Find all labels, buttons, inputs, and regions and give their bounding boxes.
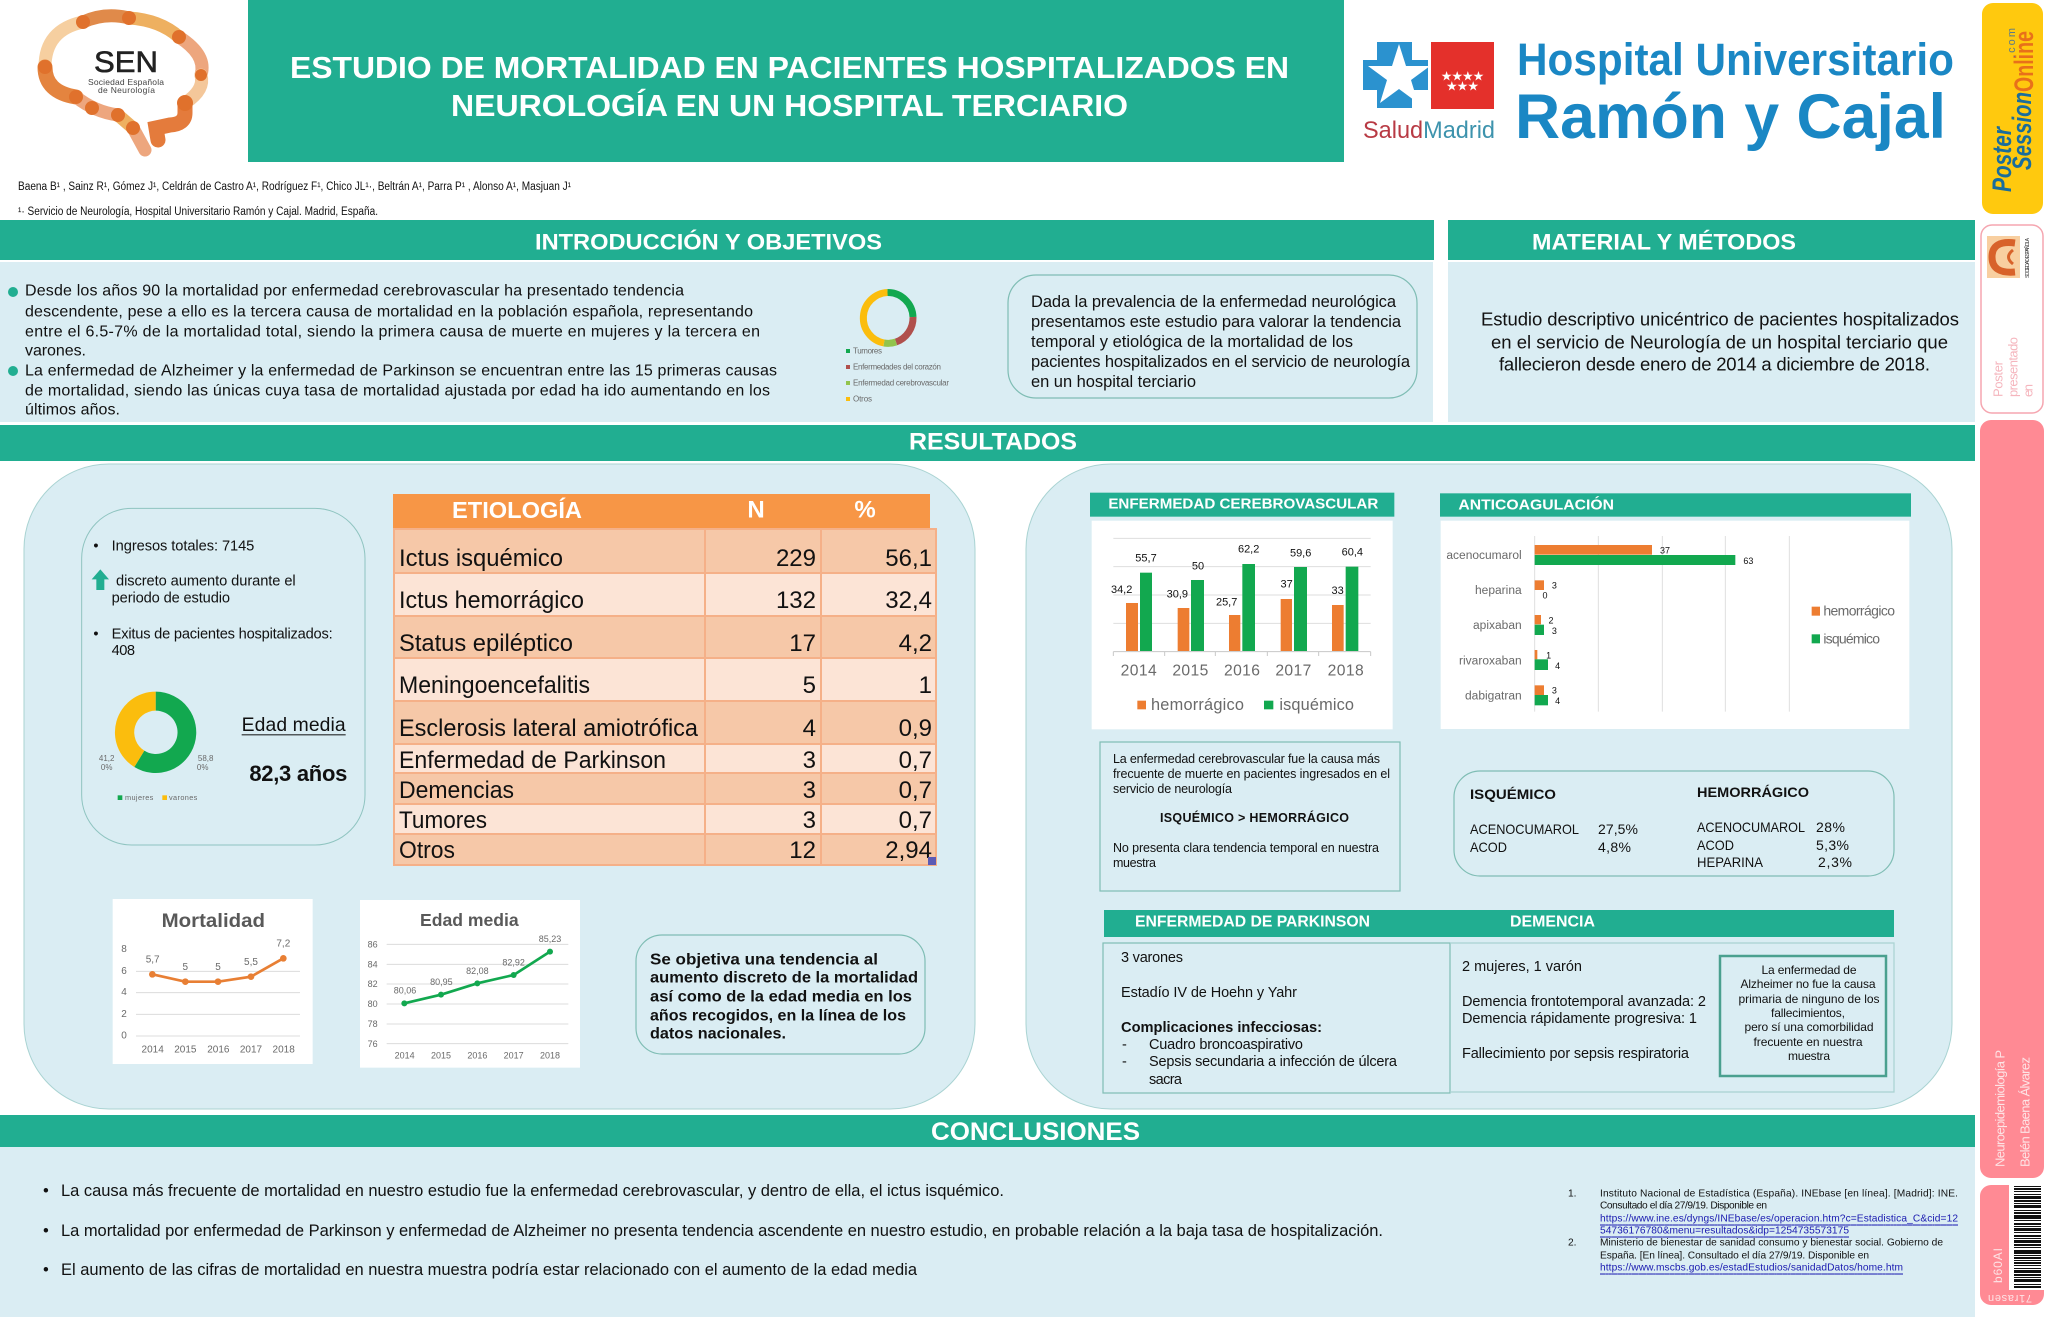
text: admissions: Exitus de pacientes hospitalizados: — [112, 626, 333, 642]
chart: enfermedad cerebrovascular: hemorrágico — [1151, 696, 1244, 714]
text box: parkinson: Sepsis secundaria a infección de úlcera — [1149, 1054, 1398, 1070]
table: etiología: Demencias — [399, 777, 514, 804]
panel: material y métodos — [1448, 220, 1975, 422]
sidebar: poster session online badge: Session — [2007, 92, 2037, 170]
chart: edad media line: 2017 — [504, 1051, 524, 1061]
text: admissions: discreto aumento durante el — [116, 574, 296, 590]
text box: cerebrovascular summary: frecuente de muerte en pacientes ingresados en el — [1113, 767, 1390, 781]
heading: introducción: INTRODUCCIÓN Y OBJETIVOS — [535, 230, 882, 254]
table: etiología: 5 — [803, 672, 816, 699]
text box: cerebrovascular summary: ISQUÉMICO > HEMORRÁGICO — [1160, 810, 1349, 825]
chart: edad media line: 80 — [368, 999, 378, 1009]
panel: results left — [24, 464, 975, 1109]
chart: anticoagulación: 37 — [1660, 546, 1670, 556]
sidebar: barcode: 71rasen — [1988, 1292, 2032, 1304]
text block: conclusions: La mortalidad por enfermedad de Parkinson y enfermedad de Alzheimer no presenta tendencia ascendente en nuestro estudio, en probable relación a la baja tasa de hospitalización. — [61, 1222, 1383, 1240]
chart: mortalidad line: 2 — [121, 1009, 127, 1020]
chart: enfermedad cerebrovascular: 34,2 — [1111, 584, 1132, 596]
chart: edad media line: 84 — [368, 959, 378, 969]
heading: parkinson and demencia: DEMENCIA — [1510, 914, 1595, 930]
chart: enfermedad cerebrovascular: 55,7 — [1135, 552, 1157, 564]
callout: alzheimer: La enfermedad de — [1762, 963, 1857, 977]
table: etiología: 32,4 — [885, 587, 932, 614]
chart: anticoagulación — [1440, 493, 1911, 729]
chart: mortalidad line: 5 — [215, 962, 221, 973]
table: etiología: % — [854, 496, 876, 524]
sidebar: poster session online badge: Online — [2009, 31, 2039, 92]
chart: mortalidad line: 5,5 — [244, 957, 258, 968]
chart: edad media line: 85,23 — [539, 934, 561, 944]
chart: mortalidad line — [113, 899, 313, 1064]
table: etiología: Status epiléptico — [399, 630, 573, 657]
text block: conclusions — [43, 1182, 1383, 1279]
text block: introduction: entre el 6.5-7% de la mortalidad total, siendo la primera causa de muerte en mujeres y la tercera en — [25, 324, 760, 340]
chart: mortalidad line: 2018 — [273, 1044, 295, 1055]
table: etiología — [393, 494, 936, 865]
authors — [18, 181, 571, 218]
logo: SEN brain: Sociedad Española — [88, 77, 164, 87]
text box: parkinson: Complicaciones infecciosas: — [1121, 1020, 1322, 1036]
text block: references — [1568, 1188, 1958, 1274]
chart: anticoagulación: 2 — [1548, 616, 1553, 626]
text block: introduction: varones. — [25, 342, 86, 360]
table: etiología: 0,7 — [899, 777, 932, 804]
chart: mortalidad line: 7,2 — [276, 938, 291, 949]
text: admissions: periodo de estudio — [112, 590, 230, 606]
chart: edad media line: 82 — [368, 979, 378, 989]
logo: SEN brain: de Neurología — [98, 85, 155, 95]
callout: tendencia: aumento discreto de la mortalidad — [650, 970, 918, 986]
table: etiología: Otros — [399, 837, 455, 864]
text: admissions: Ingresos totales: 7145 — [112, 539, 254, 555]
callout: objective: en un hospital terciario — [1031, 373, 1196, 391]
text: admissions: • — [93, 539, 98, 555]
text block: introduction — [8, 282, 777, 418]
table: etiología: 12 — [789, 837, 816, 864]
text box: anticoagulation percentages: ACENOCUMAROL — [1697, 819, 1805, 835]
text block: methods: fallecieron desde enero de 2014 a diciembre de 2018. — [1499, 354, 1930, 374]
title banner: ESTUDIO DE MORTALIDAD EN PACIENTES HOSPITALIZADOS EN — [290, 51, 1289, 85]
table: etiología: 3 — [803, 777, 816, 804]
panel: introducción y objetivos — [0, 220, 1434, 422]
chart: enfermedad cerebrovascular: 2018 — [1328, 662, 1364, 679]
heading: material y métodos: MATERIAL Y MÉTODOS — [1532, 230, 1796, 254]
text box: parkinson: 3 varones — [1121, 950, 1183, 966]
logo: Hospital Ramón y Cajal: Ramón y Cajal — [1515, 82, 1946, 152]
chart: edad media line: 2014 — [395, 1051, 415, 1061]
chart: anticoagulación: 4 — [1555, 661, 1560, 671]
sidebar: presented at: en — [2020, 384, 2036, 397]
callout: tendencia: Se objetiva una tendencia al — [650, 952, 878, 968]
chart: mortalidad line: 5 — [183, 962, 189, 973]
table: etiología: 2,94 — [885, 837, 932, 864]
chart: anticoagulación: 4 — [1555, 696, 1560, 706]
text: admissions: • — [93, 626, 98, 642]
text block: references: Instituto Nacional de Estadística (España). INEbase [en línea]. [Madrid]: INE. — [1600, 1188, 1958, 1200]
heading: resultados: RESULTADOS — [909, 428, 1077, 456]
table: etiología: Esclerosis lateral amiotrófica — [399, 715, 699, 742]
chart: sex donut: 41,2 — [99, 754, 115, 763]
chart: anticoagulación: rivaroxaban — [1459, 654, 1522, 668]
chart: enfermedad cerebrovascular: 62,2 — [1238, 543, 1259, 555]
title banner — [248, 0, 1344, 162]
sidebar: barcode: b60AI — [1991, 1248, 2005, 1283]
chart: mortalidad line: 0 — [121, 1030, 127, 1041]
callout: objective: pacientes hospitalizados en el servicio de neurología — [1031, 353, 1411, 371]
chart: enfermedad cerebrovascular: 60,4 — [1342, 547, 1363, 559]
chart: causes donut: Enfermedades del corazón — [853, 362, 941, 372]
text box: parkinson: Cuadro broncoaspirativo — [1149, 1037, 1303, 1053]
table: etiología: 4,2 — [899, 630, 932, 657]
chart: mortalidad line: 5,7 — [146, 954, 160, 965]
text block: references: Ministerio de bienestar de sanidad consumo y bienestar social. Gobierno de — [1600, 1238, 1943, 1248]
chart: enfermedad cerebrovascular: 30,9 — [1167, 589, 1188, 601]
table: etiología: 1 — [919, 672, 932, 699]
sidebar: presented at: SOCIEDAD ESPAÑOLA — [2024, 237, 2031, 278]
chart: anticoagulación: heparina — [1475, 583, 1522, 597]
sidebar: poster session online badge: .com — [2006, 28, 2018, 58]
chart: sex donut: 0% — [101, 763, 112, 772]
chart: anticoagulación: acenocumarol — [1446, 548, 1522, 562]
logo: Hospital Ramón y Cajal: Hospital Universitario — [1517, 34, 1954, 85]
chart: enfermedad cerebrovascular: ENFERMEDAD CEREBROVASCULAR — [1108, 495, 1379, 512]
text block: introduction: Desde los años 90 la mortalidad por enfermedad cerebrovascular ha presentado tendencia — [25, 282, 684, 300]
sidebar: poster session online badge — [1982, 3, 2043, 214]
text box: anticoagulation percentages: 27,5% — [1598, 821, 1638, 837]
callout: alzheimer: frecuente en nuestra — [1754, 1035, 1863, 1049]
callout: tendencia — [636, 935, 925, 1054]
chart: enfermedad cerebrovascular: 37 — [1281, 578, 1293, 590]
heading: resultados — [0, 425, 1975, 461]
chart: mortalidad line: 2017 — [240, 1044, 263, 1055]
panel: conclusiones — [0, 1115, 1975, 1317]
chart: edad media line: 78 — [368, 1019, 378, 1029]
chart: sex donut: varones — [169, 793, 198, 802]
icon: brain crest — [1987, 236, 2020, 278]
text box: anticoagulation percentages: 28% — [1816, 819, 1845, 835]
table: etiología: 0,7 — [899, 747, 932, 774]
chart: edad media line: 76 — [368, 1039, 378, 1049]
panel: admissions summary — [82, 508, 365, 845]
text box: anticoagulation percentages: 5,3% — [1816, 837, 1849, 853]
text box: parkinson: - — [1122, 1037, 1127, 1053]
text block: conclusions: • — [43, 1182, 49, 1200]
callout: alzheimer: fallecimientos, — [1771, 1006, 1845, 1020]
table: etiología: Tumores — [399, 807, 487, 834]
chart: anticoagulación: hemorrágico — [1823, 603, 1895, 619]
chart: sex donut: mujeres — [125, 793, 154, 802]
text: mean age: Edad media — [242, 715, 346, 736]
chart: edad media line: 2015 — [431, 1051, 451, 1061]
text: admissions — [93, 539, 333, 659]
callout: objective — [1008, 275, 1417, 398]
text block: introduction: La enfermedad de Alzheimer y la enfermedad de Parkinson se encuentran entre las 15 primeras causas — [25, 362, 777, 380]
text box: demencia — [1450, 943, 1894, 1092]
table: etiología: Meningoencefalitis — [399, 672, 590, 699]
text block: introduction: últimos años. — [25, 402, 120, 418]
text box: cerebrovascular summary: La enfermedad cerebrovascular fue la causa más — [1113, 752, 1380, 766]
callout: tendencia: así como de la edad media en los — [650, 988, 912, 1006]
text box: anticoagulation percentages: ISQUÉMICO — [1470, 786, 1556, 802]
table: etiología: 0,9 — [899, 715, 932, 742]
callout: alzheimer: Alzheimer no fue la causa — [1740, 977, 1876, 991]
table: etiología: Ictus isquémico — [399, 545, 563, 572]
chart: edad media line: 80,06 — [394, 986, 416, 996]
chart: sex donut: 0% — [197, 763, 208, 772]
chart: enfermedad cerebrovascular: 2016 — [1224, 662, 1260, 679]
text box: anticoagulation percentages: ACOD — [1470, 839, 1507, 855]
callout: objective: temporal y etiológica de la mortalidad de los — [1031, 333, 1353, 351]
table: etiología: N — [747, 496, 765, 524]
text box: anticoagulation percentages: 4,8% — [1598, 839, 1631, 855]
sidebar: topic and author: Neuroepidemiología P — [1992, 1050, 2008, 1167]
authors: ¹· Servicio de Neurología, Hospital Universitario Ramón y Cajal. Madrid, España. — [18, 206, 378, 218]
text block: references: Consultado el día 27/9/19. Disponible en — [1600, 1200, 1767, 1212]
chart: causes donut: Enfermedad cerebrovascular — [853, 378, 949, 388]
text box: cerebrovascular summary: muestra — [1113, 856, 1156, 870]
chart: edad media line: 80,95 — [430, 977, 453, 987]
sidebar: presented at: presentado — [2006, 337, 2020, 397]
chart: sex donut: 58,8 — [198, 754, 214, 763]
callout: alzheimer: muestra — [1788, 1049, 1830, 1063]
callout: alzheimer: primaria de ninguno de los — [1738, 992, 1880, 1006]
chart: causes donut: Tumores — [853, 346, 882, 356]
text box: demencia: Demencia rápidamente progresiva: 1 — [1462, 1011, 1697, 1027]
text block: conclusions: • — [43, 1222, 49, 1240]
text box: anticoagulation percentages: HEPARINA — [1697, 854, 1764, 870]
text block: references: España. [En línea]. Consultado el día 27/9/19. Disponible en — [1600, 1250, 1869, 1262]
authors: Baena B¹ , Sainz R¹, Gómez J¹, Celdrán de Castro A¹, Rodríguez F¹, Chico JL¹·, Beltrán A¹, Parra P¹ , Alonso A¹, Masjuan J¹ — [18, 181, 571, 193]
chart: sex donut — [99, 692, 214, 802]
heading: parkinson and demencia — [1104, 910, 1894, 937]
chart: mortalidad line: 4 — [121, 987, 127, 998]
callout: objective: presentamos este estudio para valorar la tendencia — [1031, 313, 1402, 331]
logo: Hospital Ramón y Cajal: ★★★★ — [1441, 68, 1484, 84]
chart: anticoagulación: 3 — [1552, 626, 1557, 636]
text block: references: https://www.mscbs.gob.es/estadEstudios/sanidadDatos/home.htm — [1600, 1262, 1903, 1274]
chart: enfermedad cerebrovascular: 50 — [1192, 561, 1204, 573]
chart: enfermedad cerebrovascular — [1090, 493, 1394, 729]
chart: edad media line: 2018 — [540, 1051, 560, 1061]
sidebar: presented at: Poster — [1990, 360, 2006, 397]
table: etiología: 56,1 — [885, 545, 932, 572]
table: etiología: 17 — [789, 630, 816, 657]
chart: anticoagulación: isquémico — [1823, 630, 1880, 646]
text block: methods — [1481, 308, 1959, 374]
text box: anticoagulation percentages: ACENOCUMAROL — [1470, 821, 1579, 837]
sidebar: topic and author: Belén Baena Álvarez — [2018, 1057, 2032, 1167]
text box: anticoagulation percentages: 2,3% — [1818, 854, 1852, 870]
sidebar: poster session online badge: Poster — [1987, 126, 2017, 192]
chart: enfermedad cerebrovascular: 2017 — [1275, 662, 1311, 679]
text block: methods: Estudio descriptivo unicéntrico de pacientes hospitalizados — [1481, 308, 1959, 330]
chart: anticoagulación: apixaban — [1473, 618, 1522, 632]
icon: up arrow — [92, 569, 109, 590]
chart: edad media line: 2016 — [467, 1051, 487, 1061]
text box: anticoagulation percentages — [1454, 771, 1894, 876]
chart: causes donut — [846, 292, 949, 404]
chart: causes donut: Otros — [853, 394, 872, 404]
text box: parkinson — [1103, 943, 1450, 1093]
text box: parkinson: Estadío IV de Hoehn y Yahr — [1121, 985, 1297, 1001]
text block: references: https://www.ine.es/dyngs/INEbase/es/operacion.htm?c=Estadistica_C&cid=12 — [1600, 1214, 1958, 1224]
chart: anticoagulación: 63 — [1743, 556, 1753, 566]
text box: parkinson: - — [1122, 1054, 1127, 1070]
table: etiología: 4 — [803, 715, 816, 742]
sidebar: presented at — [1981, 225, 2043, 413]
text block: introduction: descendente, pese a ello es la tercera causa de mortalidad en la población española, representando — [25, 304, 753, 320]
callout: objective: Dada la prevalencia de la enfermedad neurológica — [1031, 293, 1397, 311]
chart: anticoagulación: ANTICOAGULACIÓN — [1458, 495, 1614, 513]
table: etiología: Enfermedad de Parkinson — [399, 747, 666, 774]
callout: alzheimer — [1720, 956, 1886, 1076]
chart: anticoagulación: 0 — [1542, 591, 1547, 601]
table: etiología: 0,7 — [899, 807, 932, 834]
chart: mortalidad line: Mortalidad — [162, 911, 265, 932]
text box: cerebrovascular summary: servicio de neurología — [1113, 782, 1232, 796]
text: admissions: 408 — [112, 643, 135, 659]
text block: references: 1. — [1568, 1188, 1576, 1200]
logo: SEN brain — [38, 11, 207, 150]
text: mean age — [242, 715, 347, 786]
table: etiología: 3 — [803, 747, 816, 774]
chart: edad media line: 82,92 — [502, 957, 525, 967]
text box: cerebrovascular summary — [1100, 742, 1400, 891]
chart: edad media line: 82,08 — [466, 966, 489, 976]
sidebar: barcode — [1980, 1185, 2044, 1305]
text block: methods: en el servicio de Neurología de un hospital terciario que — [1491, 332, 1948, 352]
chart: mortalidad line: 6 — [121, 966, 127, 977]
text block: references: 2. — [1568, 1238, 1576, 1248]
chart: anticoagulación: 3 — [1552, 580, 1557, 590]
table: etiología: 132 — [776, 587, 816, 614]
chart: enfermedad cerebrovascular: 25,7 — [1216, 596, 1237, 608]
chart: anticoagulación: 1 — [1546, 651, 1551, 661]
table: etiología: 229 — [776, 545, 816, 572]
chart: edad media line: Edad media — [420, 910, 519, 930]
logo: Hospital Ramón y Cajal: ★★★ — [1446, 78, 1478, 94]
callout: tendencia: años recogidos, en la línea de los — [650, 1008, 906, 1024]
callout: tendencia: datos nacionales. — [650, 1026, 786, 1042]
text box: demencia: Demencia frontotemporal avanzada: 2 — [1462, 994, 1706, 1010]
chart: mortalidad line: 8 — [121, 944, 127, 955]
chart: mortalidad line: 2014 — [142, 1044, 164, 1055]
logo: Hospital Ramón y Cajal — [1363, 34, 1954, 152]
chart: enfermedad cerebrovascular: 2015 — [1172, 662, 1209, 679]
text box: parkinson: sacra — [1149, 1072, 1183, 1088]
chart: anticoagulación: dabigatran — [1465, 689, 1522, 703]
chart: anticoagulación: 3 — [1552, 686, 1557, 696]
text block: conclusions: La causa más frecuente de mortalidad en nuestro estudio fue la enfermedad cerebrovascular, y dentro de ella, el ictus isquémico. — [61, 1182, 1004, 1200]
title banner: NEUROLOGÍA EN UN HOSPITAL TERCIARIO — [451, 88, 1128, 123]
chart: enfermedad cerebrovascular: 59,6 — [1290, 547, 1311, 559]
chart: edad media line: 86 — [368, 939, 378, 949]
chart: enfermedad cerebrovascular: 33 — [1332, 585, 1344, 597]
panel: results right — [1026, 464, 1952, 1109]
chart: enfermedad cerebrovascular: isquémico — [1279, 696, 1354, 714]
text box: anticoagulation percentages: HEMORRÁGICO — [1697, 784, 1809, 800]
text box: anticoagulation percentages: ACOD — [1697, 837, 1734, 853]
chart: mortalidad line: 2015 — [174, 1044, 197, 1055]
chart: mortalidad line: 2016 — [207, 1044, 230, 1055]
text block: references: 54736176780&menu=resultados&idp=1254735573175 — [1600, 1226, 1849, 1236]
text box: demencia: Fallecimiento por sepsis respiratoria — [1462, 1046, 1690, 1062]
text box: cerebrovascular summary: No presenta clara tendencia temporal en nuestra — [1113, 841, 1379, 855]
text block: conclusions: El aumento de las cifras de mortalidad en nuestra muestra podría estar relacionado con el aumento de la edad media — [61, 1261, 918, 1279]
text: mean age: 82,3 años — [249, 761, 347, 786]
chart: enfermedad cerebrovascular: 2014 — [1121, 662, 1157, 679]
callout: alzheimer: pero sí una comorbilidad — [1744, 1020, 1874, 1034]
table: etiología: Ictus hemorrágico — [399, 587, 584, 614]
text box: demencia: 2 mujeres, 1 varón — [1462, 959, 1582, 975]
chart: edad media line — [360, 900, 580, 1068]
logo: Hospital Ramón y Cajal: SaludMadrid — [1363, 117, 1495, 144]
sidebar: topic and author — [1980, 420, 2044, 1178]
text block: conclusions: • — [43, 1261, 49, 1279]
text block: introduction: de mortalidad, siendo las únicas cuya tasa de mortalidad ajustada por edad ha ido aumentando en los — [25, 382, 770, 400]
logo: SEN brain: SEN — [94, 46, 158, 79]
table: etiología: 3 — [803, 807, 816, 834]
heading: parkinson and demencia: ENFERMEDAD DE PARKINSON — [1135, 914, 1370, 930]
heading: conclusiones: CONCLUSIONES — [931, 1118, 1140, 1146]
table: etiología: ETIOLOGÍA — [452, 496, 582, 523]
